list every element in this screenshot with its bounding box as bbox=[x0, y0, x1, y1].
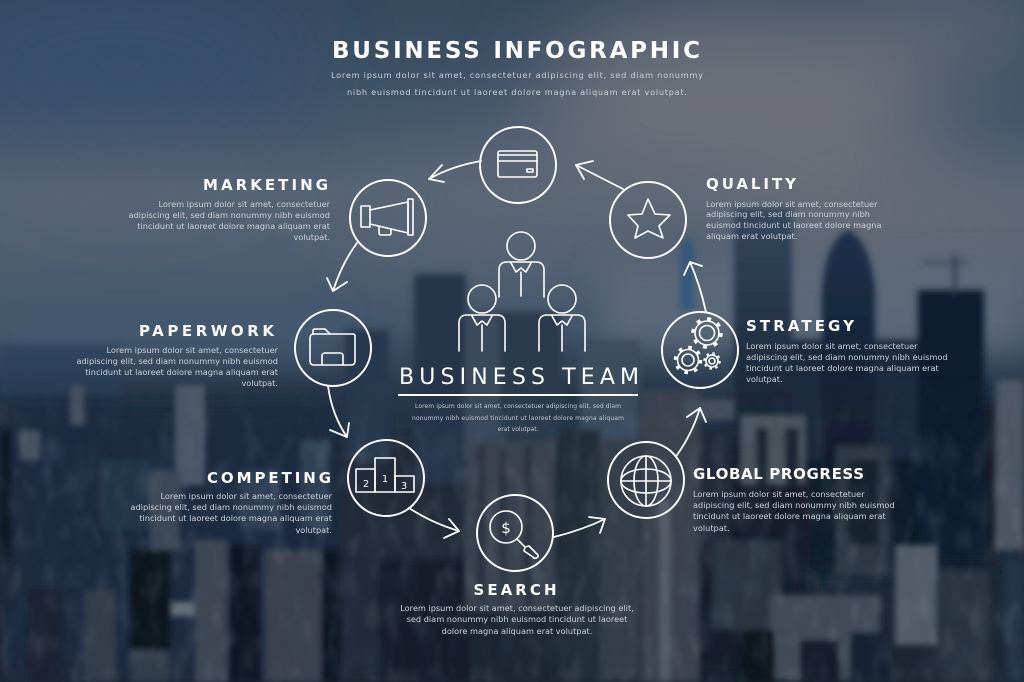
panel: paperwork: PAPERWORK bbox=[139, 322, 275, 340]
text: business team description: nonummy nibh euismod tincidunt ut laoreet dolore magna aliquam bbox=[412, 415, 624, 422]
panel: strategy: tincidunt ut laoreet dolore magna aliquam erat bbox=[746, 363, 939, 373]
subtitle bbox=[331, 70, 703, 97]
icon: globe bbox=[608, 442, 684, 518]
title: BUSINESS INFOGRAPHIC bbox=[332, 38, 700, 64]
icon: gears bbox=[662, 312, 738, 388]
icon: podium: 3 bbox=[401, 481, 407, 492]
subtitle: Lorem ipsum dolor sit amet, consectetuer adipiscing elit, sed diam nonummy bbox=[331, 70, 703, 80]
panel: paperwork: adipiscing elit, sed diam nonummy nibh euismod bbox=[76, 356, 278, 366]
panel: competing: adipiscing elit, sed diam nonummy nibh euismod bbox=[130, 502, 332, 512]
arrow: search to global progress bbox=[554, 517, 605, 537]
panel: strategy: STRATEGY bbox=[746, 317, 855, 335]
text: business team description bbox=[412, 403, 624, 433]
underline bbox=[398, 394, 638, 396]
subtitle: nibh euismod tincidunt ut laoreet dolore magna aliquam erat volutpat. bbox=[347, 87, 687, 97]
arrow: strategy to quality bbox=[684, 262, 706, 312]
icon: star bbox=[610, 182, 686, 258]
panel: marketing: adipiscing elit, sed diam nonummy nibh euismod bbox=[128, 210, 330, 220]
panel: search: Lorem ipsum dolor sit amet, consectetuer adipiscing elit, bbox=[400, 603, 634, 613]
panel: quality bbox=[706, 175, 881, 241]
panel: marketing: Lorem ipsum dolor sit amet, consectetuer bbox=[158, 199, 331, 209]
panel: competing: COMPETING bbox=[207, 469, 331, 487]
icon: credit card bbox=[480, 127, 556, 203]
panel: marketing: MARKETING bbox=[203, 176, 328, 194]
panel: paperwork: Lorem ipsum dolor sit amet, consectetuer bbox=[106, 345, 279, 355]
panel: global progress bbox=[693, 465, 895, 533]
panel: paperwork bbox=[76, 322, 279, 388]
panel: marketing: tincidunt ut laoreet dolore magna aliquam erat bbox=[137, 221, 331, 231]
panel: quality: Lorem ipsum dolor sit amet, consectetuer bbox=[706, 199, 878, 209]
panel: strategy: Lorem ipsum dolor sit amet, consectetuer bbox=[746, 341, 918, 351]
panel: strategy: adipiscing elit, sed diam nonummy nibh euismod bbox=[746, 352, 948, 362]
heading: business team: BUSINESS TEAM bbox=[399, 365, 639, 390]
left lower blocks bbox=[0, 385, 340, 682]
panel: quality: QUALITY bbox=[706, 175, 797, 193]
icon: podium bbox=[348, 440, 424, 516]
panel: quality: aliquam erat volutpat. bbox=[706, 231, 797, 241]
arrow: quality to card bbox=[576, 161, 623, 189]
arrow: global progress to strategy bbox=[677, 408, 706, 455]
panel: global progress: adipiscing elit, sed diam nonummy nibh euismod bbox=[693, 500, 895, 510]
centre lower blocks bbox=[380, 430, 640, 682]
panel: competing: Lorem ipsum dolor sit amet, consectetuer bbox=[160, 491, 333, 501]
panel: search bbox=[400, 581, 634, 636]
icon: podium: 2 bbox=[363, 479, 369, 490]
panel: competing bbox=[130, 469, 333, 535]
text: business team description: Lorem ipsum dolor sit amet, consectetuer adipiscing elit, sed diam bbox=[415, 403, 621, 410]
panel: quality: adipiscing elit, sed diam nonummy nibh bbox=[706, 209, 870, 219]
icon: search dollar bbox=[477, 495, 553, 571]
arrow: paperwork to competing bbox=[328, 386, 349, 437]
text: business team description: erat volutpat. bbox=[498, 426, 539, 433]
icon: business team bbox=[459, 232, 585, 351]
panel: global progress: tincidunt ut laoreet dolore magna aliquam erat bbox=[693, 511, 886, 521]
panel: competing: tincidunt ut laoreet dolore magna aliquam erat bbox=[139, 513, 333, 523]
panel: marketing: volutpat. bbox=[293, 232, 330, 242]
icon: podium: 1 bbox=[382, 474, 388, 485]
panel: paperwork: volutpat. bbox=[241, 378, 278, 388]
icon: folder bbox=[295, 310, 371, 386]
panel: quality: euismod tincidunt ut laoreet dolore magna bbox=[706, 220, 881, 230]
right lower blocks bbox=[640, 390, 990, 682]
panel: strategy: volutpat. bbox=[746, 374, 783, 384]
panel: strategy bbox=[746, 317, 948, 384]
mottled building texture bbox=[0, 432, 1018, 682]
panel: search: sed diam nonummy nibh euismod tincidunt ut laoreet bbox=[407, 614, 628, 624]
panel: paperwork: tincidunt ut laoreet dolore magna aliquam erat bbox=[85, 367, 279, 377]
panel: search: SEARCH bbox=[474, 581, 556, 599]
arrow: competing to search bbox=[409, 508, 459, 538]
panel: global progress: volutpat. bbox=[693, 523, 730, 533]
panel: competing: volutpat. bbox=[295, 525, 332, 535]
icon: megaphone bbox=[350, 180, 426, 256]
arrow: card to marketing bbox=[429, 161, 481, 182]
panel: global progress: GLOBAL PROGRESS bbox=[693, 465, 864, 483]
panel: global progress: Lorem ipsum dolor sit amet, consectetuer bbox=[693, 489, 865, 499]
icon: search dollar: $ bbox=[501, 519, 511, 537]
panel: marketing bbox=[128, 176, 331, 242]
arrow: marketing to paperwork bbox=[327, 243, 357, 291]
panel: search: dolore magna aliquam erat volutpat. bbox=[442, 626, 592, 636]
